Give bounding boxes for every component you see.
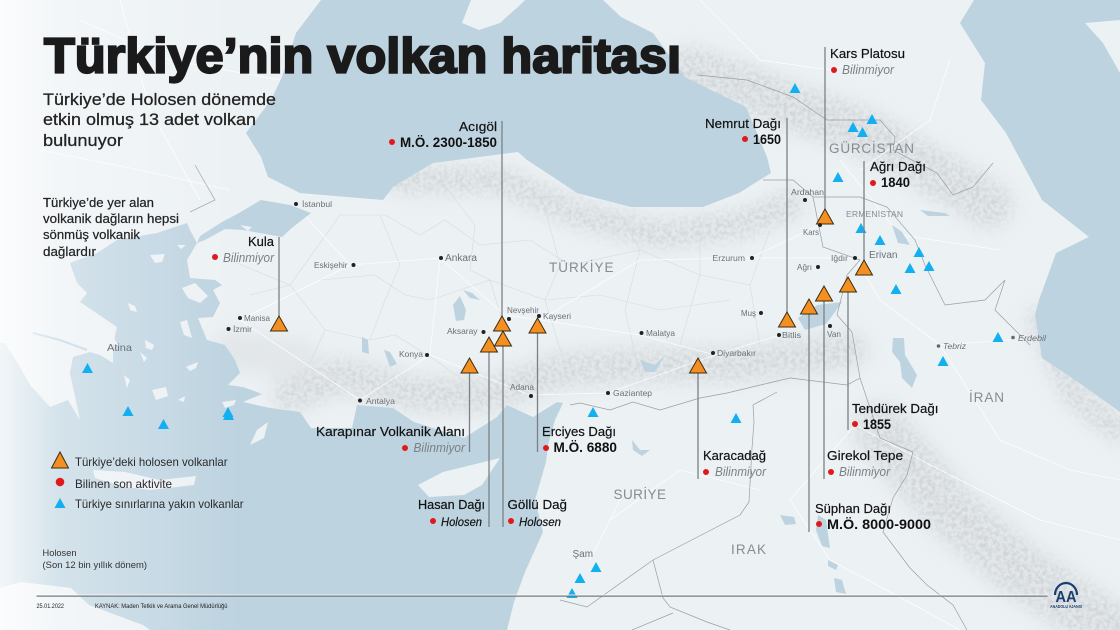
- volcano: Erciyes Dağı: M.Ö. 6880: [554, 440, 617, 455]
- city markers: Erivan: [869, 249, 898, 261]
- country names: ERMENİSTAN: [846, 209, 903, 219]
- city markers: Muş: [741, 308, 756, 318]
- date: 25.01.2022: [36, 603, 64, 610]
- mountain shading: [230, 70, 1120, 630]
- city markers: Ağrı: [797, 262, 812, 272]
- side note: Türkiye’de yer alan: [43, 196, 154, 210]
- sea: Caspian: [960, 0, 1120, 412]
- volcano: Süphan Dağı: Süphan Dağı: [815, 501, 891, 516]
- subtitle: etkin olmuş 13 adet volkan: [43, 111, 256, 129]
- Holosen note: Holosen: [42, 548, 76, 559]
- city markers: İzmir: [233, 324, 252, 334]
- volcano: Ağrı Dağı: [856, 159, 926, 275]
- sea: Gulf of Corinth: [33, 333, 87, 350]
- logo: Anadolu Ajansı: ANADOLU AJANSI: [1050, 604, 1082, 609]
- city markers: Atina: [107, 342, 132, 354]
- city markers: Konya: [399, 349, 423, 359]
- volcano: Süphan Dağı: [800, 299, 931, 532]
- volcano: Kars Platosu: [816, 46, 905, 227]
- volcano: Kars Platosu: Kars Platosu: [830, 46, 905, 61]
- city markers: Tebriz: [943, 341, 967, 351]
- city markers: Aksaray: [447, 326, 478, 336]
- Holosen note: [42, 548, 147, 571]
- legend: Türkiye’deki holosen volkanlar: [75, 455, 228, 469]
- logo: Anadolu Ajansı: AA: [1056, 589, 1077, 606]
- volcano: Kula: Bilinmiyor: [223, 251, 275, 265]
- lakes: [362, 210, 950, 594]
- city markers: Van: [827, 329, 841, 339]
- city markers: Nevşehir: [507, 305, 539, 315]
- volcano: Karacadağ: Karacadağ: [703, 448, 766, 463]
- country borders: [190, 75, 1030, 630]
- source: KAYNAK: Maden Tetkik ve Arama Genel Müdürlüğü: [95, 603, 228, 610]
- country names: SURİYE: [614, 487, 666, 502]
- subtitle: bulunuyor: [43, 132, 124, 150]
- sea: Marmara: [197, 200, 311, 243]
- volcano: Nemrut Dağı: 1650: [753, 132, 781, 147]
- country names: IRAK: [731, 542, 766, 557]
- city markers: Kars: [803, 227, 819, 237]
- volcano: Girekol Tepe: [816, 286, 903, 479]
- volcano: Kars Platosu: Bilinmiyor: [842, 63, 895, 77]
- city markers: Malatya: [646, 328, 675, 338]
- volcano: Göllü Dağ: Göllü Dağ: [508, 497, 567, 512]
- Holosen note: (Son 12 bin yıllık dönem): [42, 560, 147, 571]
- volcano: Erciyes Dağı: [529, 318, 617, 455]
- volcano: Tendürek Dağı: Tendürek Dağı: [852, 401, 938, 416]
- city markers: Diyarbakır: [717, 348, 756, 358]
- volcano: Karapınar Volkanik Alanı: Karapınar Volkanik Alanı: [316, 424, 465, 439]
- city markers: İstanbul: [302, 199, 332, 209]
- subtitle: Türkiye’de Holosen dönemde: [43, 91, 276, 109]
- country names: İRAN: [969, 390, 1004, 405]
- nearby volcano markers (blue triangles): [82, 83, 1004, 598]
- legend: Bilinen son aktivite: [75, 477, 172, 491]
- volcano: Karapınar Volkanik Alanı: Bilinmiyor: [414, 441, 466, 455]
- city markers: Manisa: [244, 313, 270, 323]
- volcano: Tendürek Dağı: 1855: [863, 417, 891, 432]
- country names: GÜRCİSTAN: [829, 141, 914, 156]
- city markers: Iğdır: [831, 253, 848, 263]
- volcano: Erciyes Dağı: Erciyes Dağı: [542, 424, 616, 439]
- volcano: Karacadağ: [690, 358, 767, 479]
- volcano: Ağrı Dağı: Ağrı Dağı: [870, 159, 926, 174]
- volcano: Acıgöl: [389, 119, 510, 331]
- city markers: Gaziantep: [613, 388, 652, 398]
- side note: volkanik dağların hepsi: [43, 212, 179, 226]
- city markers: Ankara: [445, 253, 477, 264]
- city markers: Kayseri: [543, 311, 571, 321]
- volcano: Tendürek Dağı: [840, 277, 938, 432]
- city markers: [107, 187, 1047, 560]
- volcano: Nemrut Dağı: Nemrut Dağı: [705, 116, 781, 131]
- volcano: Girekol Tepe: Bilinmiyor: [839, 465, 891, 479]
- footer line: [36, 594, 1048, 597]
- volcano: Karacadağ: Bilinmiyor: [715, 465, 767, 479]
- country names: TÜRKİYE: [549, 260, 614, 275]
- city markers: Erzurum: [712, 253, 745, 263]
- side note: dağlardır: [43, 245, 96, 259]
- legend: [52, 452, 244, 511]
- volcano: Hasan Dağı: Holosen: [441, 515, 482, 529]
- city markers: Eskişehir: [314, 260, 348, 270]
- city markers: Şam: [572, 548, 593, 560]
- volcano: Hasan Dağı: [418, 337, 498, 529]
- volcano: Acıgöl: Acıgöl: [459, 119, 497, 134]
- side note: sönmüş volkanik: [43, 228, 141, 242]
- volcano: Hasan Dağı: Hasan Dağı: [418, 497, 485, 512]
- volcano: Süphan Dağı: M.Ö. 8000-9000: [827, 517, 931, 532]
- city markers: Erdebil: [1018, 333, 1047, 343]
- volcano: Göllü Dağ: Holosen: [519, 515, 561, 529]
- volcano: Nemrut Dağı: [705, 116, 796, 327]
- sea: Black Sea: [246, 0, 771, 207]
- left fade: [0, 0, 240, 630]
- volcano: Girekol Tepe: Girekol Tepe: [827, 448, 903, 463]
- volcano: Kula: [212, 234, 288, 331]
- country names: [549, 141, 1004, 557]
- logo: Anadolu Ajansı: [1050, 583, 1082, 609]
- volcano: Acıgöl: M.Ö. 2300-1850: [400, 135, 497, 150]
- volcano: Ağrı Dağı: 1840: [881, 175, 910, 190]
- legend: Türkiye sınırlarına yakın volkanlar: [75, 497, 244, 511]
- volcano: Karapınar Volkanik Alanı: [316, 358, 478, 455]
- islands: [93, 225, 500, 497]
- city markers: Bitlis: [782, 330, 801, 340]
- city markers: Adana: [510, 382, 534, 392]
- city markers: Ardahan: [791, 187, 824, 197]
- side note: [43, 196, 179, 259]
- subtitle: [43, 91, 276, 150]
- volcano: Göllü Dağ: [494, 331, 567, 529]
- sea: Aegean and Mediterranean: [0, 223, 563, 630]
- volcano: Kula: Kula: [248, 234, 275, 249]
- title: Türkiye’nin volkan haritası: [44, 30, 681, 84]
- city markers: Antalya: [366, 396, 395, 406]
